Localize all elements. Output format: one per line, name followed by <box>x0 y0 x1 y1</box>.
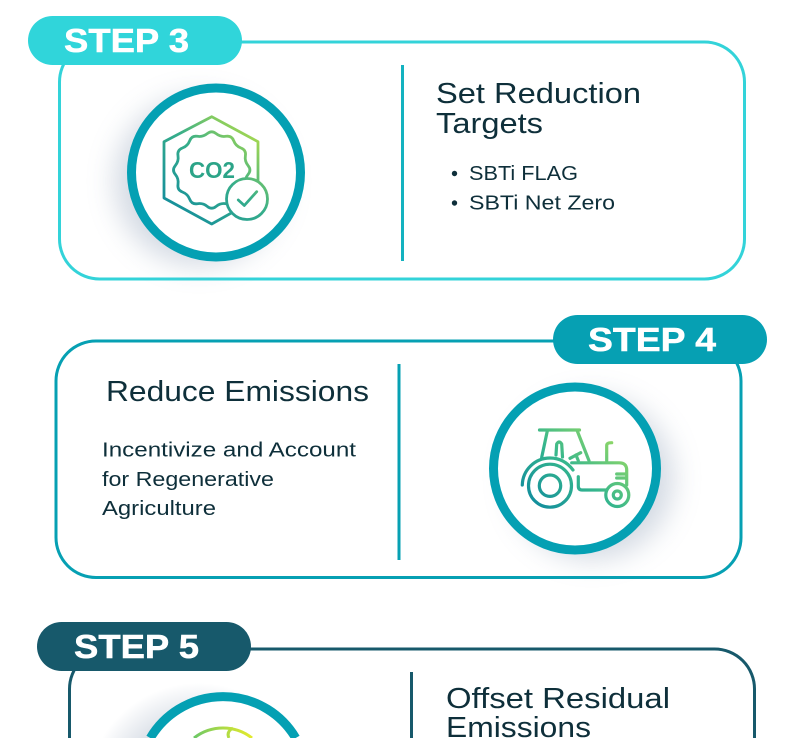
divider <box>410 672 413 738</box>
icon: tractor in circle <box>494 387 656 550</box>
circle shadow <box>80 680 260 738</box>
heading: Offset Residual <box>446 683 670 715</box>
bullet list <box>452 163 615 214</box>
divider <box>398 364 400 560</box>
heading <box>436 78 641 140</box>
panel border: step 3 <box>60 42 744 279</box>
panel: step 5 <box>37 622 754 738</box>
panel border: step 5 <box>70 649 754 738</box>
panel: step 3 <box>28 16 744 279</box>
heading: Targets <box>436 108 543 140</box>
heading <box>446 683 670 738</box>
icon: CO2 hexagon with check in circle: CO2 <box>189 157 235 183</box>
body text: Incentivize and Account <box>102 440 357 462</box>
body text: for Regenerative <box>102 469 274 491</box>
circle shadow <box>511 397 673 559</box>
heading: Set Reduction <box>436 78 641 110</box>
body text <box>102 440 357 520</box>
bullet list: SBTi FLAG <box>469 163 578 185</box>
step 5 badge: STEP 5 <box>74 628 199 665</box>
step 4 badge: STEP 4 <box>588 321 717 358</box>
icon: CO2 hexagon with check in circle <box>132 88 300 257</box>
step 5 badge <box>37 622 251 671</box>
step 3 badge <box>28 16 242 65</box>
divider <box>401 65 404 261</box>
bullet list: SBTi Net Zero <box>469 192 615 214</box>
step 3 badge: STEP 3 <box>64 22 189 59</box>
panel border: step 4 <box>56 341 741 578</box>
heading: Reduce Emissions <box>106 376 369 408</box>
circle shadow <box>115 97 283 265</box>
body text: Agriculture <box>102 498 216 520</box>
icon: globe in circle <box>150 697 296 738</box>
panel: step 4 <box>56 315 767 578</box>
step 4 badge <box>553 315 767 364</box>
